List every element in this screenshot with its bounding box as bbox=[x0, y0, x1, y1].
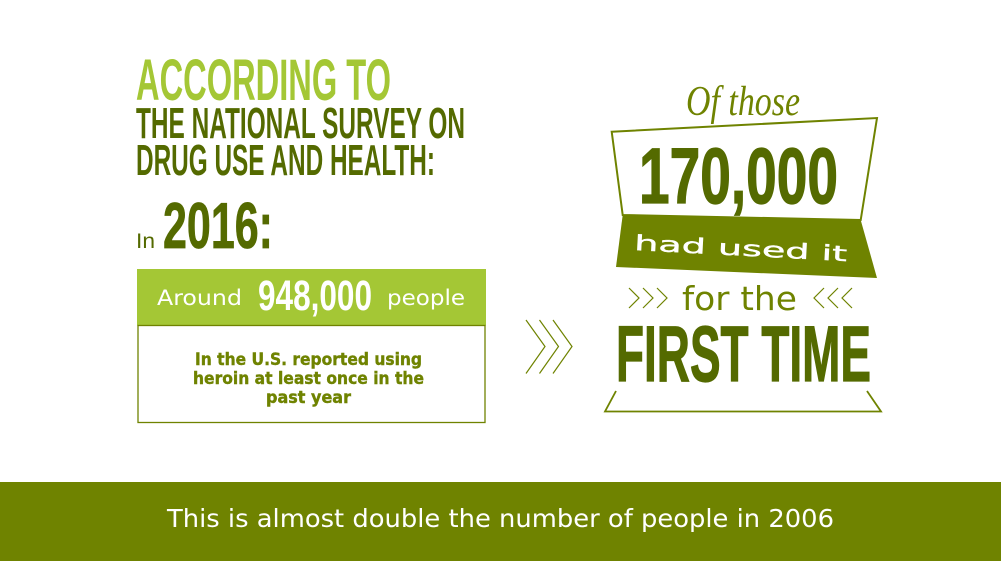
stat description bbox=[138, 326, 485, 422]
stat header bar: people bbox=[387, 286, 465, 310]
heading: ACCORDING TO bbox=[136, 48, 391, 113]
chevrons right bbox=[814, 288, 852, 308]
year label: 2016: bbox=[163, 189, 273, 262]
chevrons left bbox=[629, 288, 667, 308]
heading: DRUG USE AND HEALTH: bbox=[136, 136, 435, 185]
stat description: heroin at least once in the bbox=[193, 369, 424, 388]
stat description: past year bbox=[266, 388, 352, 407]
panel: statistic box bbox=[137, 269, 486, 422]
bracket bbox=[605, 391, 881, 412]
stat description: In the U.S. reported using bbox=[195, 350, 422, 369]
panel: 170,000 frame bbox=[612, 118, 877, 220]
arrow: triple chevron bbox=[526, 320, 572, 374]
stat header bar bbox=[137, 269, 486, 326]
panel: 170,000 frame: 170,000 bbox=[639, 131, 838, 220]
script caption: Of those bbox=[686, 79, 800, 125]
heading bbox=[136, 48, 465, 185]
year label bbox=[136, 189, 273, 262]
footer band bbox=[0, 482, 1001, 561]
banner: had used it: had used it bbox=[634, 231, 848, 266]
heading: THE NATIONAL SURVEY ON bbox=[136, 99, 465, 148]
for the: for the bbox=[682, 279, 797, 318]
footer band: This is almost double the number of people in 2006 bbox=[166, 504, 834, 533]
stat header bar: 948,000 bbox=[258, 272, 372, 320]
stat header bar: Around bbox=[157, 286, 242, 310]
year label: In bbox=[136, 230, 155, 253]
banner: had used it bbox=[616, 215, 877, 278]
